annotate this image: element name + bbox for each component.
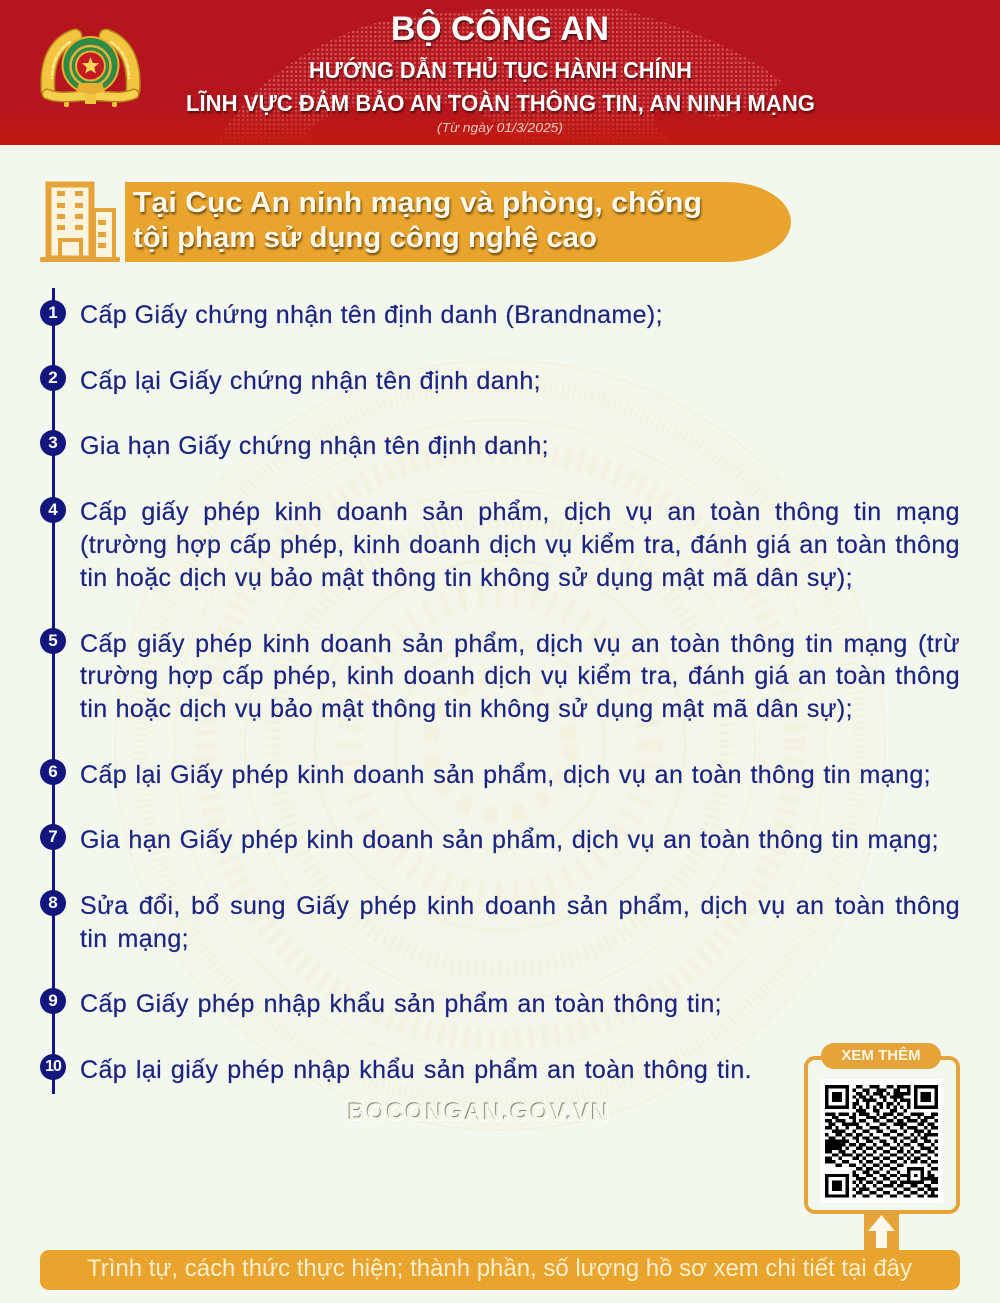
- list item 8: 8: [48, 893, 58, 912]
- watermark: national emblem drum pattern: [114, 359, 886, 1131]
- list item 3: 3: [48, 433, 58, 452]
- list item 4: 4: [48, 500, 58, 519]
- list item 4: [40, 497, 960, 592]
- QR frame: [804, 1056, 960, 1214]
- list item 7: Gia hạn Giấy phép kinh doanh sản phẩm, dịch vụ an toàn thông tin mạng;: [80, 826, 939, 854]
- list item 7: 7: [48, 827, 58, 846]
- header title text: (Từ ngày 01/3/2025): [437, 120, 563, 135]
- arrow connector: [864, 1214, 899, 1250]
- list item 8: tin mạng;: [80, 925, 189, 953]
- icon: building: [40, 182, 120, 262]
- list item 2: Cấp lại Giấy chứng nhận tên định danh;: [80, 367, 541, 395]
- header title text: HƯỚNG DẪN THỦ TỤC HÀNH CHÍNH: [309, 55, 692, 83]
- bottom call-to-action bar: [40, 1250, 960, 1290]
- list item 5: 5: [48, 631, 58, 650]
- list item 3: Gia hạn Giấy chứng nhận tên định danh;: [80, 432, 549, 460]
- timeline line: [52, 288, 54, 1094]
- list item 9: Cấp Giấy phép nhập khẩu sản phẩm an toàn thông tin;: [80, 990, 722, 1018]
- header title text: BỘ CÔNG AN: [391, 9, 609, 48]
- list item 5: [40, 628, 960, 723]
- list item 6: 6: [48, 762, 58, 781]
- list item 1: 1: [48, 303, 58, 322]
- list item 4: (trường hợp cấp phép, kinh doanh dịch vụ kiểm tra, đánh giá an toàn thông: [80, 531, 960, 559]
- list item 9: 9: [48, 991, 58, 1010]
- list item 5: tin hoặc dịch vụ bảo mật thông tin không sử dụng mật mã dân sự);: [80, 695, 853, 723]
- list item 4: tin hoặc dịch vụ bảo mật thông tin không sử dụng mật mã dân sự);: [80, 564, 853, 592]
- header title text: [186, 9, 816, 135]
- emblem: police badge: [40, 28, 141, 107]
- list item 4: Cấp giấy phép kinh doanh sản phẩm, dịch vụ an toàn thông tin mạng: [80, 498, 960, 526]
- list item 5: trường hợp cấp phép, kinh doanh dịch vụ kiểm tra, đánh giá an toàn thông: [80, 662, 960, 690]
- source watermark text: BOCONGAN.GOV.VN: [348, 1099, 610, 1126]
- list item 6: Cấp lại Giấy phép kinh doanh sản phẩm, dịch vụ an toàn thông tin mạng;: [80, 761, 931, 789]
- section heading banner: [125, 182, 791, 262]
- bottom call-to-action bar: Trình tự, cách thức thực hiện; thành phần, số lượng hồ sơ xem chi tiết tại đây: [87, 1255, 912, 1282]
- section heading banner: Tại Cục An ninh mạng và phòng, chống: [133, 187, 702, 219]
- list item 10: Cấp lại giấy phép nhập khẩu sản phẩm an toàn thông tin.: [80, 1056, 752, 1084]
- list item 1: Cấp Giấy chứng nhận tên định danh (Brandname);: [80, 301, 663, 329]
- header banner: [0, 0, 1000, 145]
- QR panel: [804, 1043, 960, 1250]
- list item 10: 10: [45, 1058, 61, 1075]
- list item 8: Sửa đổi, bổ sung Giấy phép kinh doanh sản phẩm, dịch vụ an toàn thông: [80, 892, 960, 920]
- QR label pill: XEM THÊM: [841, 1047, 921, 1064]
- list item 2: 2: [48, 368, 58, 387]
- list item 5: Cấp giấy phép kinh doanh sản phẩm, dịch vụ an toàn thông tin mạng (trừ: [80, 630, 960, 658]
- QR label pill: [821, 1043, 941, 1069]
- QR code: [820, 1079, 943, 1203]
- section heading banner: tội phạm sử dụng công nghệ cao: [133, 222, 597, 254]
- list item 8: [40, 890, 960, 953]
